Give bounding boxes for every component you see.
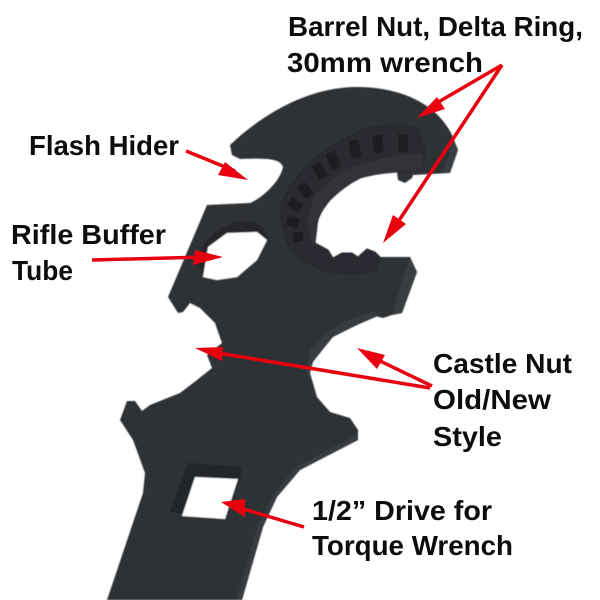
ring band bbox=[280, 125, 425, 274]
crescent tip face bbox=[442, 135, 458, 173]
buffer tube hole bbox=[198, 221, 267, 277]
arrow: rifle buffer tube bbox=[92, 250, 223, 265]
square drive hole bbox=[170, 463, 242, 519]
arrow: flash hider bbox=[186, 151, 248, 180]
ring inner lip bbox=[307, 153, 423, 247]
arrow: castle nut left bbox=[195, 347, 430, 388]
right block face bbox=[392, 257, 417, 315]
label: castle nut: Old/New bbox=[433, 384, 551, 415]
arrow: half inch drive bbox=[221, 499, 304, 527]
label: barrel nut bbox=[287, 11, 583, 78]
arrow: castle nut right bbox=[357, 348, 432, 386]
label: half inch drive: 1/2” Drive for bbox=[312, 495, 492, 526]
label: half inch drive bbox=[312, 495, 513, 561]
arrow: barrel nut lower bbox=[383, 65, 502, 243]
lower right bevel bbox=[236, 434, 358, 600]
label: castle nut: Style bbox=[433, 421, 502, 452]
label: barrel nut: 30mm wrench bbox=[287, 47, 483, 78]
arrow: barrel nut upper bbox=[417, 65, 502, 118]
label: barrel nut: Barrel Nut, Delta Ring, bbox=[288, 11, 583, 42]
label: flash hider: Flash Hider bbox=[29, 130, 179, 161]
label: rifle buffer tube bbox=[11, 219, 166, 286]
label: castle nut: Castle Nut bbox=[433, 348, 572, 379]
label: half inch drive: Torque Wrench bbox=[312, 530, 513, 561]
label: rifle buffer tube: Rifle Buffer bbox=[11, 219, 166, 250]
wrench tool bbox=[107, 87, 458, 600]
label: rifle buffer tube: Tube bbox=[12, 255, 73, 286]
label: castle nut bbox=[433, 348, 572, 452]
castle nut arc bevel bbox=[307, 311, 378, 382]
ring teeth bbox=[286, 134, 408, 243]
